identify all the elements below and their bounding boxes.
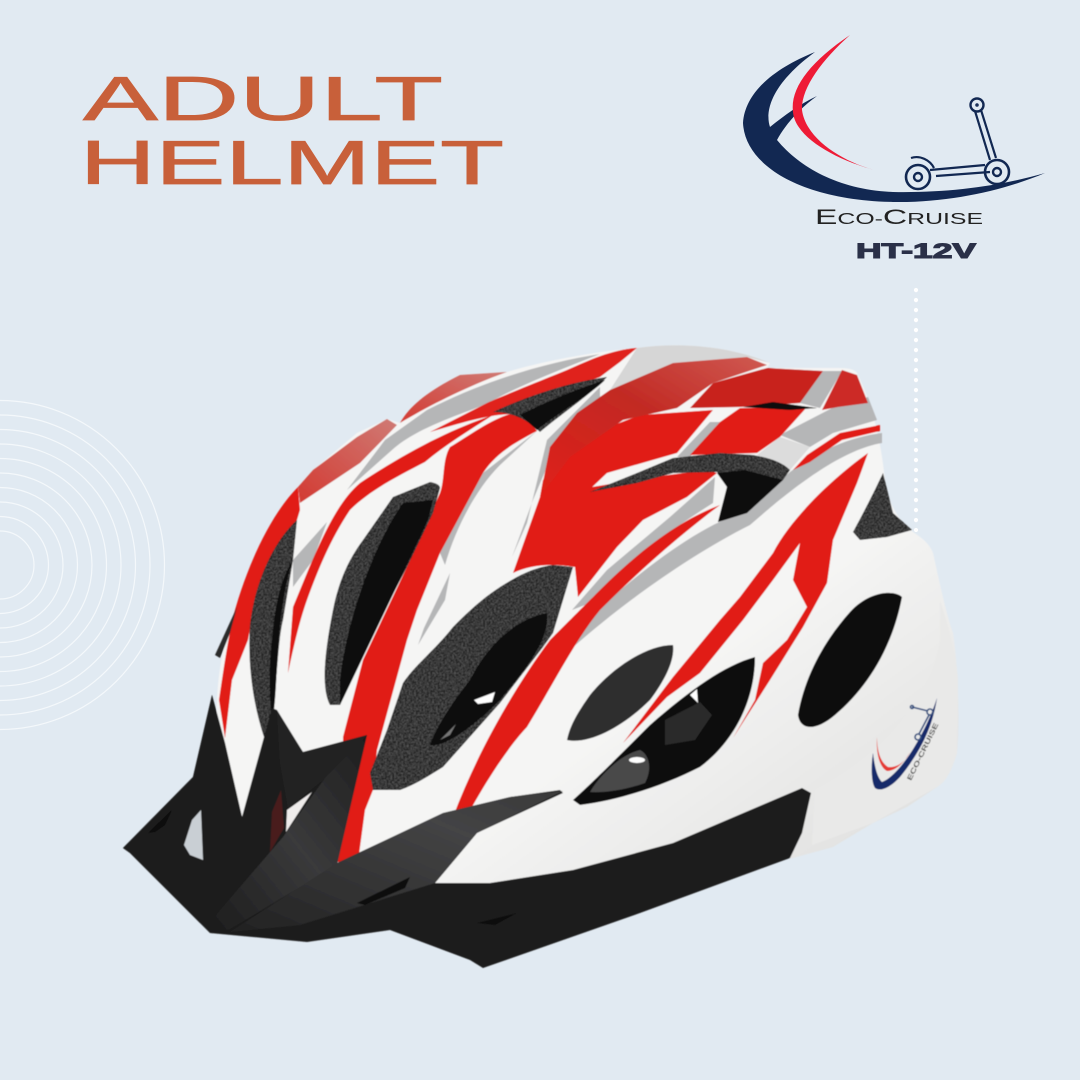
helmet logo decal (872, 698, 941, 790)
helmet (123, 345, 958, 968)
helmet: pale upper red panels (298, 372, 507, 503)
visor: main body (123, 695, 811, 968)
helmet: inner vent details (440, 689, 712, 792)
logo: model name: HT-12V (856, 240, 976, 263)
helmet: top grey crest (610, 345, 770, 390)
right forked stripe (623, 453, 868, 743)
visor: dark red gap behind spikes (270, 790, 284, 852)
helmet: white shell (217, 345, 958, 885)
concentric circles decoration (0, 400, 164, 730)
upper panel bright (540, 410, 713, 497)
visor: large spike (210, 735, 367, 932)
second band (288, 415, 493, 673)
upper right panel bright (690, 407, 807, 455)
brand logo (743, 35, 1045, 263)
helmet: dark red top panels (540, 357, 868, 497)
visor: white gap behind spikes (286, 792, 312, 832)
logo: navy swoosh (743, 52, 1045, 202)
helmet: small oval vent (567, 645, 673, 741)
logo: scooter (906, 98, 1009, 189)
visor: brim holes (357, 877, 410, 905)
helmet: vent black cores (215, 380, 902, 805)
visor: left nose (123, 695, 242, 923)
title line: HELMET: HELMET (80, 129, 504, 198)
helmet: silver bands (293, 354, 882, 650)
helmet: right lobe shading (812, 600, 958, 845)
far-left band (219, 487, 300, 738)
thin red line (793, 425, 880, 470)
logo: red swoosh (793, 35, 878, 171)
helmet: top band red (430, 348, 637, 432)
visor: brim highlight (230, 791, 563, 932)
helmet: red bands (219, 407, 880, 862)
decal text: ECO-CRUISE (907, 722, 941, 782)
visor: side holes (148, 810, 172, 833)
logo: brand name: E CO- C RUISE (815, 206, 983, 229)
visor: small middle piece (277, 712, 367, 808)
lower-center panel (513, 470, 717, 597)
title line: ADULT: ADULT (83, 65, 443, 134)
central band (337, 414, 537, 862)
helmet: chrome chip (757, 437, 810, 470)
helmet: black visor (123, 695, 811, 968)
decal swooshes (872, 698, 937, 790)
dotted vertical line (914, 290, 918, 530)
helmet: foam vents (249, 377, 912, 790)
diagonal strip (453, 505, 720, 817)
title (80, 65, 504, 198)
decal scooter (910, 706, 933, 740)
